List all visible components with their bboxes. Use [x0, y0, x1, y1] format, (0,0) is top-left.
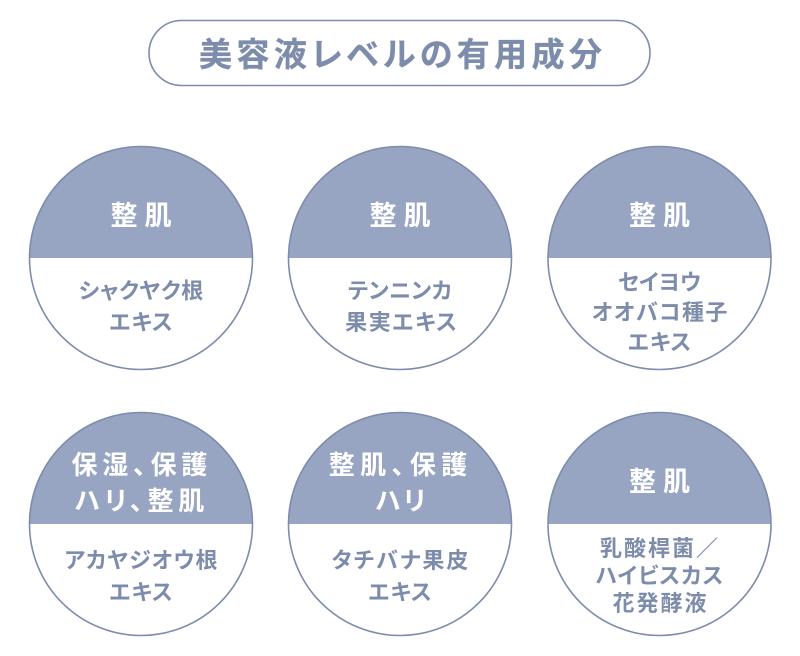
panel: 乳酸桿菌／ハイビスカス花発酵液: 乳酸桿菌／ — [600, 536, 720, 561]
panel: シャクヤク根エキス: シャクヤク根 — [79, 278, 204, 304]
panel: 乳酸桿菌／ハイビスカス花発酵液 — [548, 412, 771, 636]
panel: タチバナ果皮エキス: エキス — [368, 580, 433, 605]
panel: セイヨウオオバコ種子エキス: セイヨウ — [618, 270, 701, 295]
panel: タチバナ果皮エキス — [288, 412, 512, 636]
panel: 乳酸桿菌／ハイビスカス花発酵液: ハイビスカス — [596, 564, 724, 588]
panel: シャクヤク根エキス: 整肌 — [110, 201, 178, 231]
panel: セイヨウオオバコ種子エキス — [548, 146, 771, 370]
panel: 乳酸桿菌／ハイビスカス花発酵液: 花発酵液 — [612, 591, 709, 616]
panel: テンニンカ果実エキス — [288, 146, 512, 370]
panel: タチバナ果皮エキス: 整肌、保護 — [329, 450, 473, 480]
panel: アカヤジオウ根エキス: エキス — [109, 580, 174, 605]
panel: セイヨウオオバコ種子エキス: エキス — [628, 330, 692, 355]
panel: アカヤジオウ根エキス: 保湿、保護 — [72, 450, 212, 480]
panel: アカヤジオウ根エキス: アカヤジオウ根 — [65, 548, 218, 573]
panel: テンニンカ果実エキス: 整肌 — [370, 201, 438, 231]
panel: タチバナ果皮エキス: タチバナ果皮 — [332, 548, 470, 573]
panel: アカヤジオウ根エキス: ハリ、整肌 — [75, 486, 209, 516]
panel: アカヤジオウ根エキス — [30, 412, 252, 636]
title: 美容液レベルの有用成分 — [199, 36, 606, 73]
panel: テンニンカ果実エキス: 果実エキス — [345, 310, 459, 335]
panel: 乳酸桿菌／ハイビスカス花発酵液: 整肌 — [629, 467, 697, 497]
panel: シャクヤク根エキス: エキス — [109, 310, 174, 335]
panel: セイヨウオオバコ種子エキス: オオバコ種子 — [592, 300, 729, 325]
title — [149, 20, 650, 86]
panel: セイヨウオオバコ種子エキス: 整肌 — [629, 201, 697, 231]
panel: シャクヤク根エキス — [30, 146, 252, 370]
panel: タチバナ果皮エキス: ハリ — [375, 486, 429, 516]
panel: テンニンカ果実エキス: テンニンカ — [348, 278, 452, 304]
